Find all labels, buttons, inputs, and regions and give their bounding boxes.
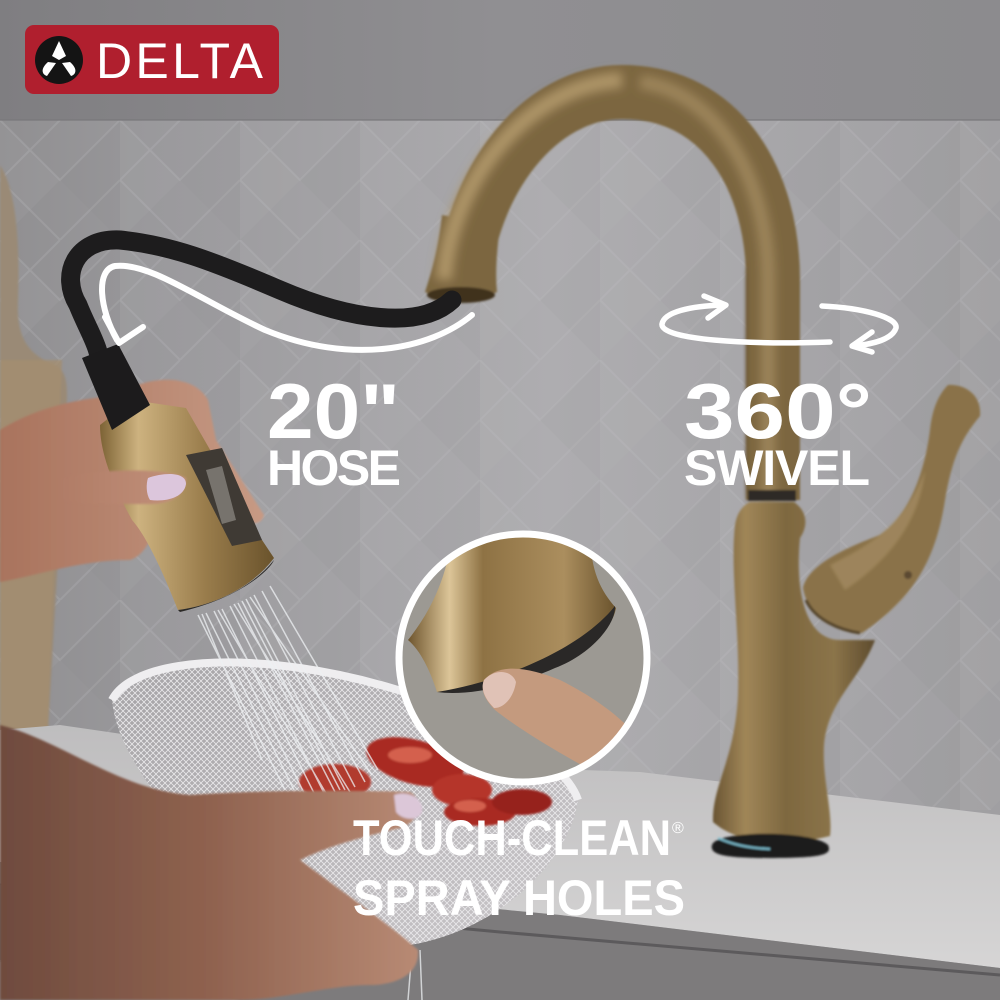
label: touch-clean spray holes: SPRAY HOLES bbox=[353, 870, 685, 926]
inset: touch-clean close up bbox=[399, 530, 647, 782]
icon: delta emblem bbox=[35, 36, 83, 84]
colander bbox=[112, 663, 578, 945]
label: touch-clean spray holes bbox=[353, 810, 685, 926]
spout flare bbox=[425, 215, 500, 301]
spout tube bbox=[462, 92, 773, 500]
arrow: hose length bbox=[102, 266, 472, 350]
thumbnail bbox=[147, 474, 186, 500]
upper hand bbox=[0, 380, 264, 582]
arrow: swivel bbox=[662, 296, 896, 352]
label: 360 swivel bbox=[684, 367, 872, 496]
spray head bbox=[60, 344, 274, 612]
base bbox=[712, 834, 829, 858]
thumb bbox=[60, 470, 186, 504]
handle bbox=[803, 385, 980, 633]
label: 20 inch hose: 20" bbox=[267, 367, 400, 455]
hose bbox=[71, 240, 452, 352]
water spray bbox=[198, 586, 422, 1000]
logo: Delta bbox=[25, 25, 279, 94]
counter front and cabinet bbox=[0, 862, 1000, 1000]
faucet bbox=[425, 80, 980, 858]
strawberries bbox=[299, 728, 552, 826]
logo: Delta: DELTA bbox=[96, 33, 264, 89]
label: 360 swivel: 360° bbox=[684, 367, 872, 455]
neck ring bbox=[748, 490, 796, 501]
label: 20 inch hose bbox=[267, 367, 401, 496]
cutting board bbox=[0, 165, 67, 730]
lower hand bbox=[0, 725, 422, 1000]
label: 20 inch hose: HOSE bbox=[267, 440, 401, 496]
label: touch-clean spray holes: ® bbox=[672, 820, 684, 837]
label: 360 swivel: SWIVEL bbox=[684, 440, 870, 496]
label: touch-clean spray holes: TOUCH-CLEAN bbox=[353, 810, 671, 866]
faucet body bbox=[713, 502, 875, 842]
fingertip bbox=[482, 668, 624, 764]
counter bbox=[0, 725, 1000, 968]
